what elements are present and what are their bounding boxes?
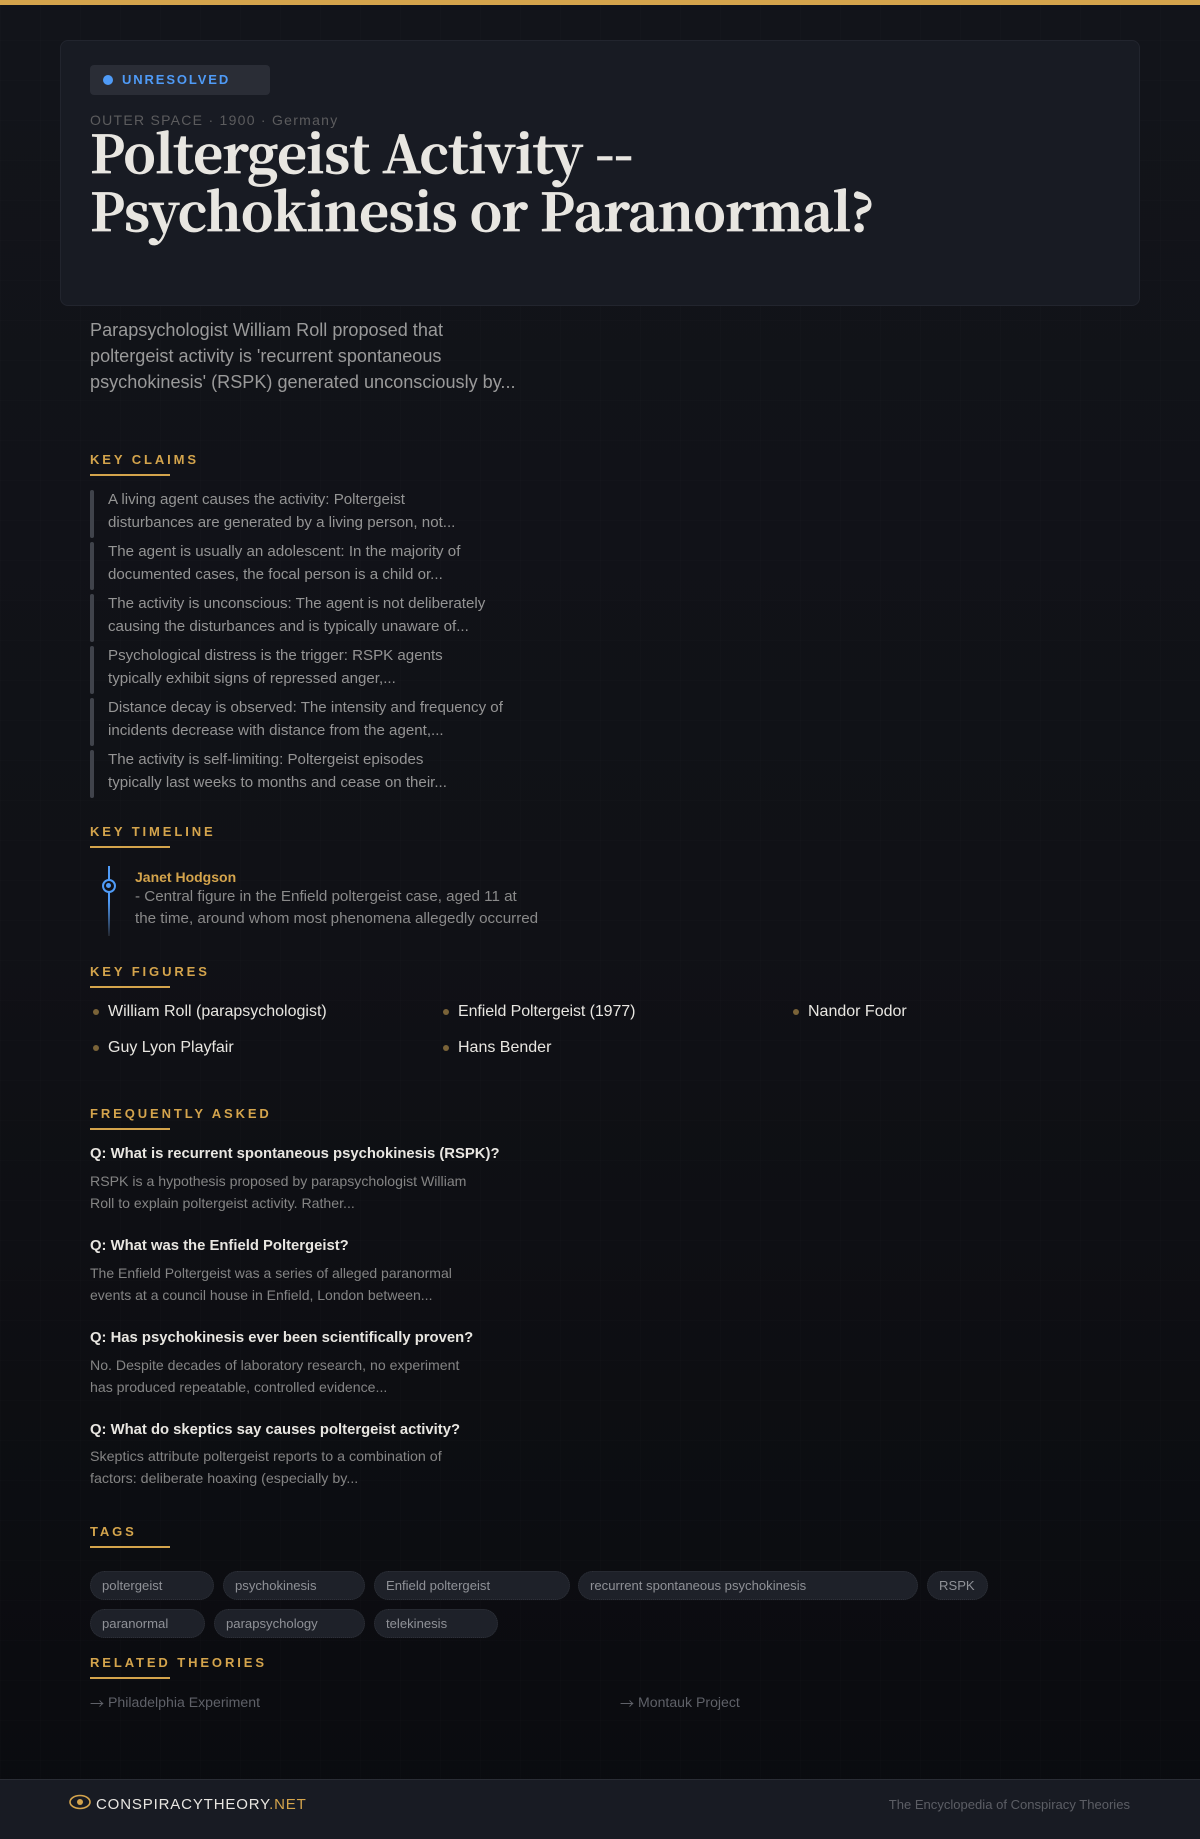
title: Poltergeist Activity -- xyxy=(90,113,633,188)
claim 2: documented cases, the focal person is a child or... xyxy=(108,566,443,582)
tag: RSPK xyxy=(927,1571,988,1600)
claim 5: Distance decay is observed: The intensity and frequency of xyxy=(108,698,503,716)
icon: status dot xyxy=(103,75,113,85)
icon: timeline marker xyxy=(102,879,116,893)
summary text: Parapsychologist William Roll proposed that xyxy=(90,320,443,340)
tag: recurrent spontaneous psychokinesis: recurrent spontaneous psychokinesis xyxy=(590,1578,806,1593)
claim 2: The agent is usually an adolescent: In the majority of xyxy=(108,542,460,560)
related link: Philadelphia Experiment: → Philadelphia Experiment xyxy=(90,1694,260,1714)
heading: key timeline: KEY TIMELINE xyxy=(90,824,216,839)
tag: Enfield poltergeist xyxy=(374,1571,570,1600)
claim 5: incidents decrease with distance from the agent,... xyxy=(108,722,444,738)
tag: RSPK: RSPK xyxy=(939,1578,975,1593)
claim 2 xyxy=(90,542,460,590)
panel: related theories xyxy=(90,1655,740,1714)
timeline entry description: - Central figure in the Enfield poltergeist case, aged 11 at xyxy=(135,888,517,905)
question 4: Skeptics attribute poltergeist reports to a combination of xyxy=(90,1449,442,1465)
tag: telekinesis: telekinesis xyxy=(386,1616,447,1631)
top accent bar xyxy=(0,0,1200,5)
title xyxy=(90,113,874,246)
question 3: Q: Has psychokinesis ever been scientifically proven? xyxy=(90,1330,473,1346)
claim 4 xyxy=(90,646,443,694)
figure: Enfield Poltergeist: Enfield Poltergeist (1977) xyxy=(458,1003,635,1020)
claim 3 xyxy=(90,594,486,642)
timeline line xyxy=(108,866,110,936)
panel: footer xyxy=(0,1779,1200,1839)
question 1: Q: What is recurrent spontaneous psychokinesis (RSPK)? xyxy=(90,1146,500,1162)
related link: Montauk Project: → Montauk Project xyxy=(620,1694,740,1714)
claim 6: The activity is self-limiting: Poltergeist episodes xyxy=(108,750,423,768)
tag: recurrent spontaneous psychokinesis xyxy=(578,1571,918,1600)
question 3: No. Despite decades of laboratory research, no experiment xyxy=(90,1357,459,1373)
panel: key timeline xyxy=(90,824,538,936)
heading: frequently asked: FREQUENTLY ASKED xyxy=(90,1106,272,1121)
question 3: has produced repeatable, controlled evidence... xyxy=(90,1379,387,1395)
panel: key figures xyxy=(90,964,907,1056)
question 1 xyxy=(90,1146,500,1211)
heading: key claims: KEY CLAIMS xyxy=(90,452,199,467)
claim 3: causing the disturbances and is typically unaware of... xyxy=(108,618,469,634)
question 4: factors: deliberate hoaxing (especially by... xyxy=(90,1471,358,1487)
claim 1: disturbances are generated by a living person, not... xyxy=(108,514,455,530)
claim 4: Psychological distress is the trigger: RSPK agents xyxy=(108,646,443,664)
figure: Nandor Fodor: Nandor Fodor xyxy=(808,1003,907,1020)
question 2 xyxy=(90,1238,452,1303)
claim 1: A living agent causes the activity: Poltergeist xyxy=(108,490,405,508)
summary text: psychokinesis' (RSPK) generated unconsciously by... xyxy=(90,372,516,392)
badge label: UNRESOLVED xyxy=(122,72,230,87)
figure: Hans Bender: Hans Bender xyxy=(458,1039,551,1056)
question 3 xyxy=(90,1330,473,1395)
heading: related theories: RELATED THEORIES xyxy=(90,1655,267,1670)
icon: eye logo xyxy=(69,1794,91,1810)
tag: psychokinesis: psychokinesis xyxy=(235,1578,317,1593)
tag: poltergeist: poltergeist xyxy=(102,1578,162,1593)
timeline entry description: the time, around whom most phenomena allegedly occurred xyxy=(135,910,538,927)
panel: key claims xyxy=(90,452,503,798)
summary text xyxy=(90,320,516,392)
title: Psychokinesis or Paranormal? xyxy=(90,171,874,246)
tag: parapsychology: parapsychology xyxy=(226,1616,318,1631)
tag: paranormal xyxy=(90,1609,205,1638)
question 4 xyxy=(90,1422,460,1487)
question 2: events at a council house in Enfield, London between... xyxy=(90,1287,432,1303)
tag: telekinesis xyxy=(374,1609,498,1638)
panel: frequently asked xyxy=(90,1106,500,1487)
panel: tags xyxy=(90,1524,988,1638)
tag: Enfield poltergeist: Enfield poltergeist xyxy=(386,1578,490,1593)
timeline entry name: Janet Hodgson xyxy=(135,869,236,885)
heading: tags: TAGS xyxy=(90,1524,137,1539)
status badge: unresolved xyxy=(90,65,270,95)
question 2: Q: What was the Enfield Poltergeist? xyxy=(90,1238,349,1254)
summary text: poltergeist activity is 'recurrent spontaneous xyxy=(90,346,441,366)
claim 6: typically last weeks to months and cease on their... xyxy=(108,774,447,790)
tag: paranormal: paranormal xyxy=(102,1616,168,1631)
timeline entry description xyxy=(135,888,538,927)
question 1: RSPK is a hypothesis proposed by parapsychologist William xyxy=(90,1173,466,1189)
panel: header card xyxy=(60,40,1140,306)
tag: psychokinesis xyxy=(223,1571,365,1600)
claim 6 xyxy=(90,750,447,798)
question 4: Q: What do skeptics say causes poltergeist activity? xyxy=(90,1422,460,1438)
site name: CONSPIRACYTHEORY.NET xyxy=(96,1796,307,1813)
figure: William Roll: William Roll (parapsychologist) xyxy=(108,1003,327,1020)
claim 3: The activity is unconscious: The agent is not deliberately xyxy=(108,594,485,612)
heading: key figures: KEY FIGURES xyxy=(90,964,210,979)
claim 1 xyxy=(90,490,455,538)
question 1: Roll to explain poltergeist activity. Rather... xyxy=(90,1195,355,1211)
claim 4: typically exhibit signs of repressed anger,... xyxy=(108,670,396,686)
category, year and location: OUTER SPACE · 1900 · Germany xyxy=(90,112,338,128)
tag: parapsychology xyxy=(214,1609,365,1638)
claim 5 xyxy=(90,698,503,746)
tagline: The Encyclopedia of Conspiracy Theories xyxy=(889,1797,1130,1812)
tag: poltergeist xyxy=(90,1571,214,1600)
question 2: The Enfield Poltergeist was a series of alleged paranormal xyxy=(90,1265,452,1281)
figure: Guy Lyon Playfair: Guy Lyon Playfair xyxy=(108,1039,234,1056)
